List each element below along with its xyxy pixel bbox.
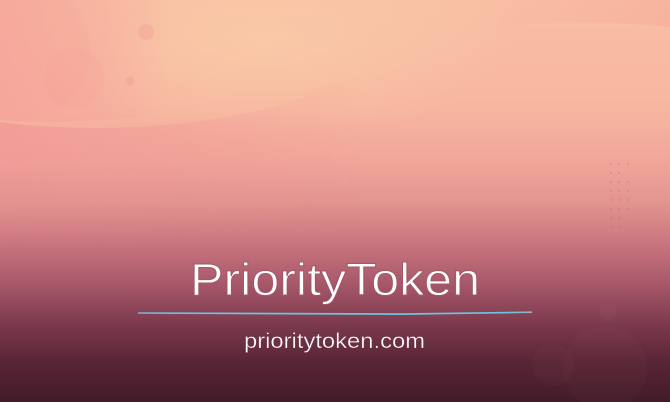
title: PriorityToken <box>190 254 480 305</box>
decorative wave: top right <box>480 0 670 27</box>
underline <box>138 311 532 315</box>
decorative dot grid: right <box>610 163 629 228</box>
decorative circles: bottom right <box>532 303 647 402</box>
domain name: prioritytoken.com <box>244 330 425 353</box>
left pink tint <box>0 0 170 122</box>
decorative circles: top left <box>0 0 154 120</box>
warm glow <box>15 0 515 135</box>
decorative wave: shaded area below curve <box>0 113 252 170</box>
